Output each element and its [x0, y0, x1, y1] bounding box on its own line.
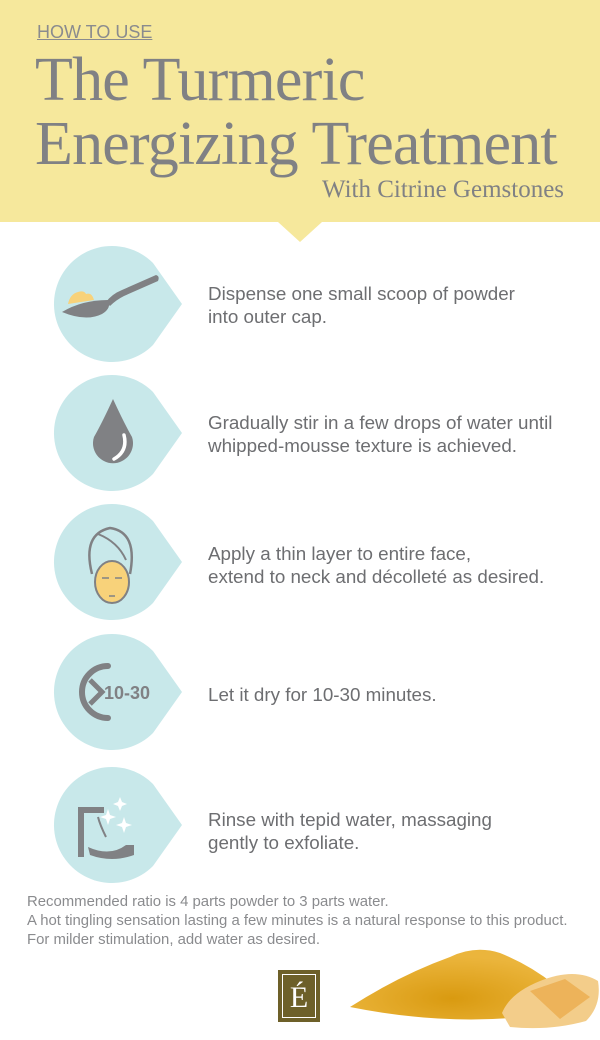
- icon: face mask: [54, 504, 182, 620]
- text: step 4: Let it dry for 10-30 minutes.: [208, 684, 437, 705]
- logo: [278, 970, 320, 1022]
- icon: timer: [54, 634, 182, 750]
- text: step 2: [208, 412, 552, 456]
- step 4: [54, 634, 182, 750]
- text: step 2: Gradually stir in a few drops of water until: [208, 412, 552, 433]
- title: Energizing Treatment: [35, 110, 557, 178]
- text: step 5: [208, 809, 492, 853]
- header band: [0, 0, 600, 242]
- text: step 3: extend to neck and décolleté as desired.: [208, 566, 544, 587]
- footnote text: [27, 894, 568, 948]
- footnote text: Recommended ratio is 4 parts powder to 3 parts water.: [27, 894, 389, 910]
- label: how to use: HOW TO USE: [37, 22, 152, 42]
- text: step 5: Rinse with tepid water, massaging: [208, 809, 492, 830]
- footnote text: A hot tingling sensation lasting a few minutes is a natural response to this product.: [27, 913, 568, 929]
- text: step 3: [208, 543, 544, 587]
- text: step 3: Apply a thin layer to entire face,: [208, 543, 471, 564]
- title: [35, 46, 558, 178]
- step 1: [54, 246, 182, 362]
- step 2: [54, 375, 182, 491]
- icon: spoon: [54, 246, 182, 362]
- logo: É: [290, 981, 308, 1014]
- step 3: [54, 504, 182, 620]
- text: step 2: whipped-mousse texture is achieved.: [208, 435, 517, 456]
- icon: faucet and hand: [54, 767, 182, 883]
- text: step 1: into outer cap.: [208, 306, 327, 327]
- text: step 1: [208, 283, 515, 327]
- icon: timer: 10-30: [104, 683, 150, 703]
- image: turmeric and citrine: [350, 950, 599, 1028]
- footnote text: For milder stimulation, add water as desired.: [27, 932, 320, 948]
- subtitle: With Citrine Gemstones: [322, 176, 564, 203]
- step 5: [54, 767, 182, 883]
- text: step 5: gently to exfoliate.: [208, 832, 359, 853]
- text: step 1: Dispense one small scoop of powder: [208, 283, 515, 304]
- title: The Turmeric: [35, 46, 365, 114]
- icon: water drop: [54, 375, 182, 491]
